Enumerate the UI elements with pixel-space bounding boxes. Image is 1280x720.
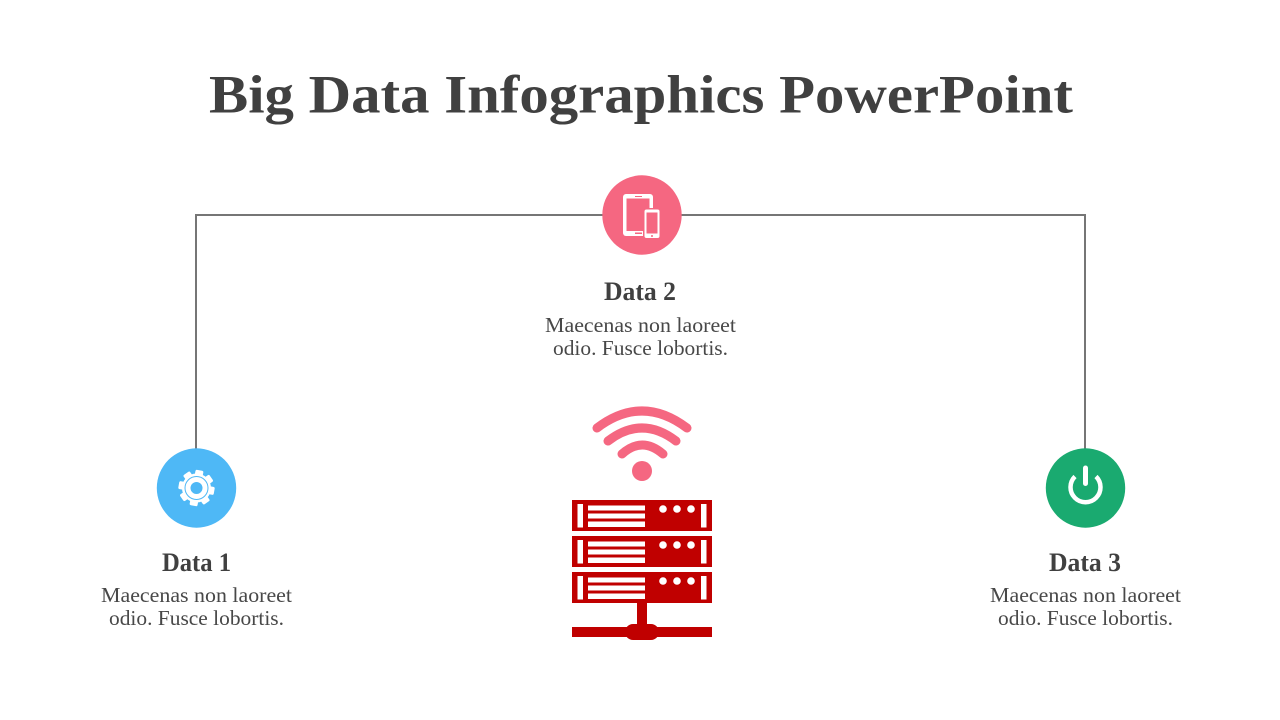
text: Data 2: Maecenas non laoreet: [545, 313, 736, 337]
text: Data 1: Maecenas non laoreet: [101, 583, 292, 607]
title: Big Data Infographics PowerPoint: [209, 64, 1073, 124]
text: Data 3: Data 3: [1049, 548, 1121, 577]
text: Data 2: odio. Fusce lobortis.: [553, 336, 728, 360]
text: Data 2: Data 2: [604, 277, 676, 306]
text: Data 3: odio. Fusce lobortis.: [998, 606, 1173, 630]
icon: power: [1046, 448, 1125, 528]
text: Data 1: odio. Fusce lobortis.: [109, 606, 284, 630]
icon: gear: [157, 448, 236, 528]
icon: wifi signal: [597, 411, 687, 481]
text: Data 1: Data 1: [162, 548, 231, 577]
text: Data 3: [990, 548, 1181, 630]
connector line: [196, 215, 1085, 450]
text: Data 1: [101, 548, 292, 630]
icon: server rack: [572, 500, 712, 640]
text: Data 3: Maecenas non laoreet: [990, 583, 1181, 607]
icon: tablet and phone: [602, 175, 682, 255]
text: Data 2: [545, 277, 736, 360]
